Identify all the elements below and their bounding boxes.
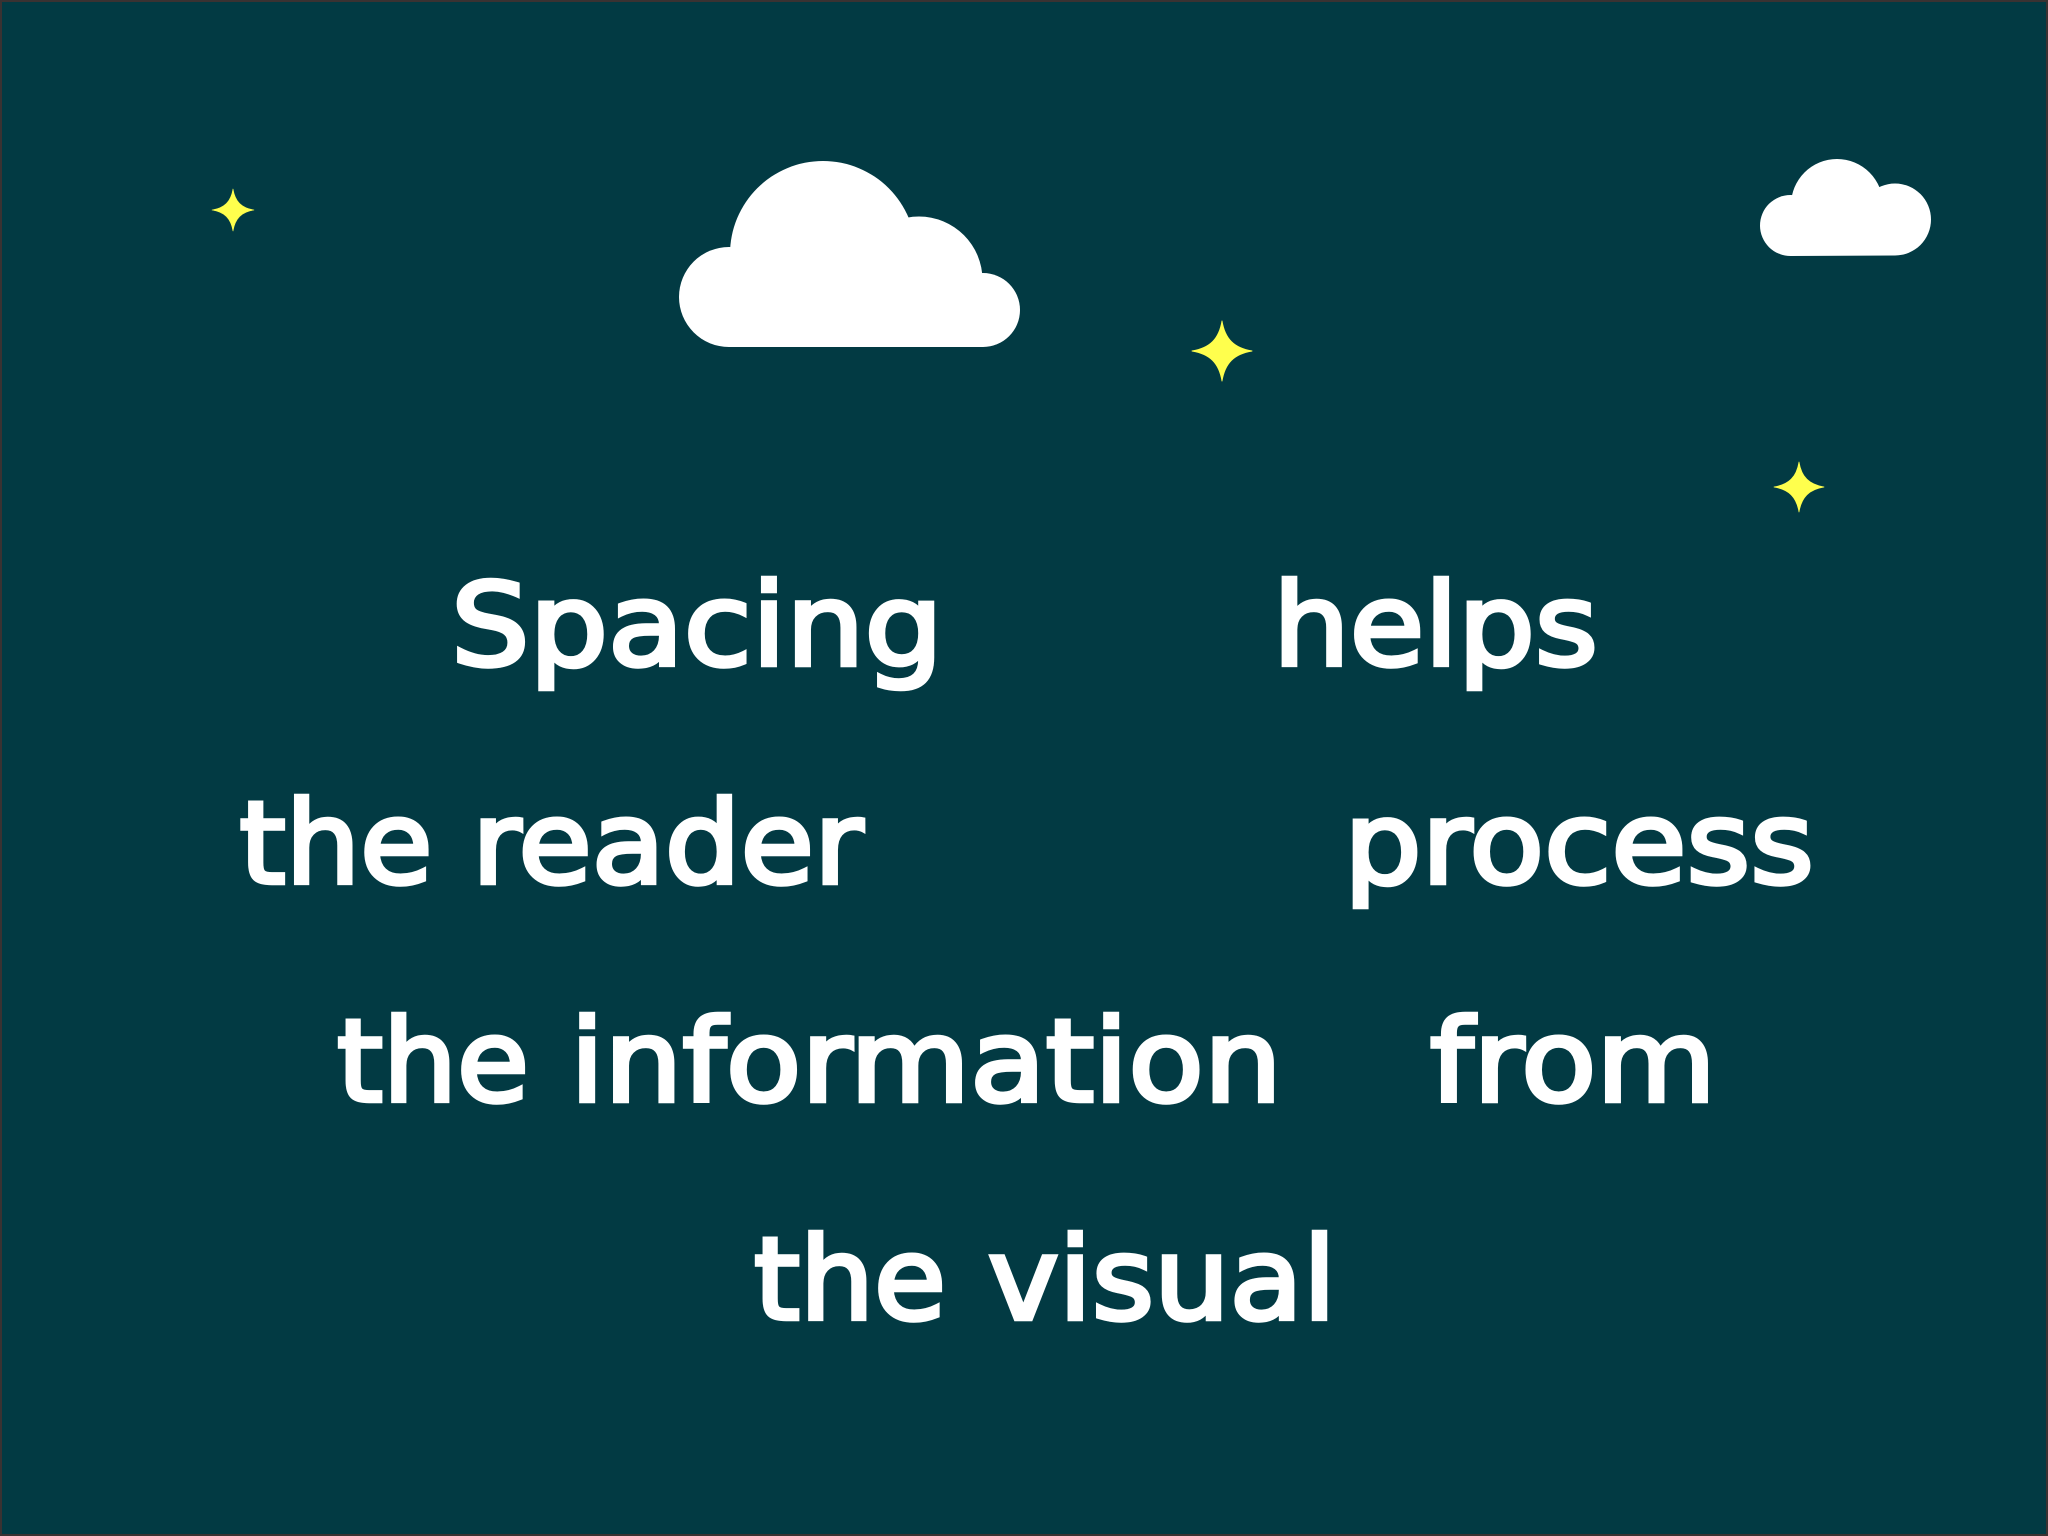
icon: yellow star centre bbox=[1192, 321, 1252, 381]
text line 3: the information from: information bbox=[570, 995, 1282, 1128]
icon: large cloud bbox=[679, 161, 1020, 347]
text line 2: the reader process: process bbox=[1344, 777, 1814, 910]
text line 2: the reader process: reader bbox=[472, 777, 863, 910]
text line 2: the reader process bbox=[240, 777, 1814, 910]
icon: yellow star right bbox=[1774, 462, 1824, 512]
text line 4: the visual bbox=[754, 1213, 1336, 1346]
text line 3: the information from: the bbox=[337, 995, 529, 1128]
text line 1: Spacing helps bbox=[451, 559, 1598, 692]
text line 3: the information from bbox=[337, 995, 1716, 1128]
icon: small cloud bbox=[1760, 159, 1931, 256]
text line 2: the reader process: the bbox=[240, 777, 432, 910]
text line 4: the visual: visual bbox=[988, 1213, 1336, 1346]
text line 4: the visual: the bbox=[754, 1213, 946, 1346]
text line 1: Spacing helps: Spacing bbox=[451, 559, 943, 692]
icon: yellow star left bbox=[212, 189, 254, 231]
text line 3: the information from: from bbox=[1430, 995, 1716, 1128]
text line 1: Spacing helps: helps bbox=[1273, 559, 1598, 692]
